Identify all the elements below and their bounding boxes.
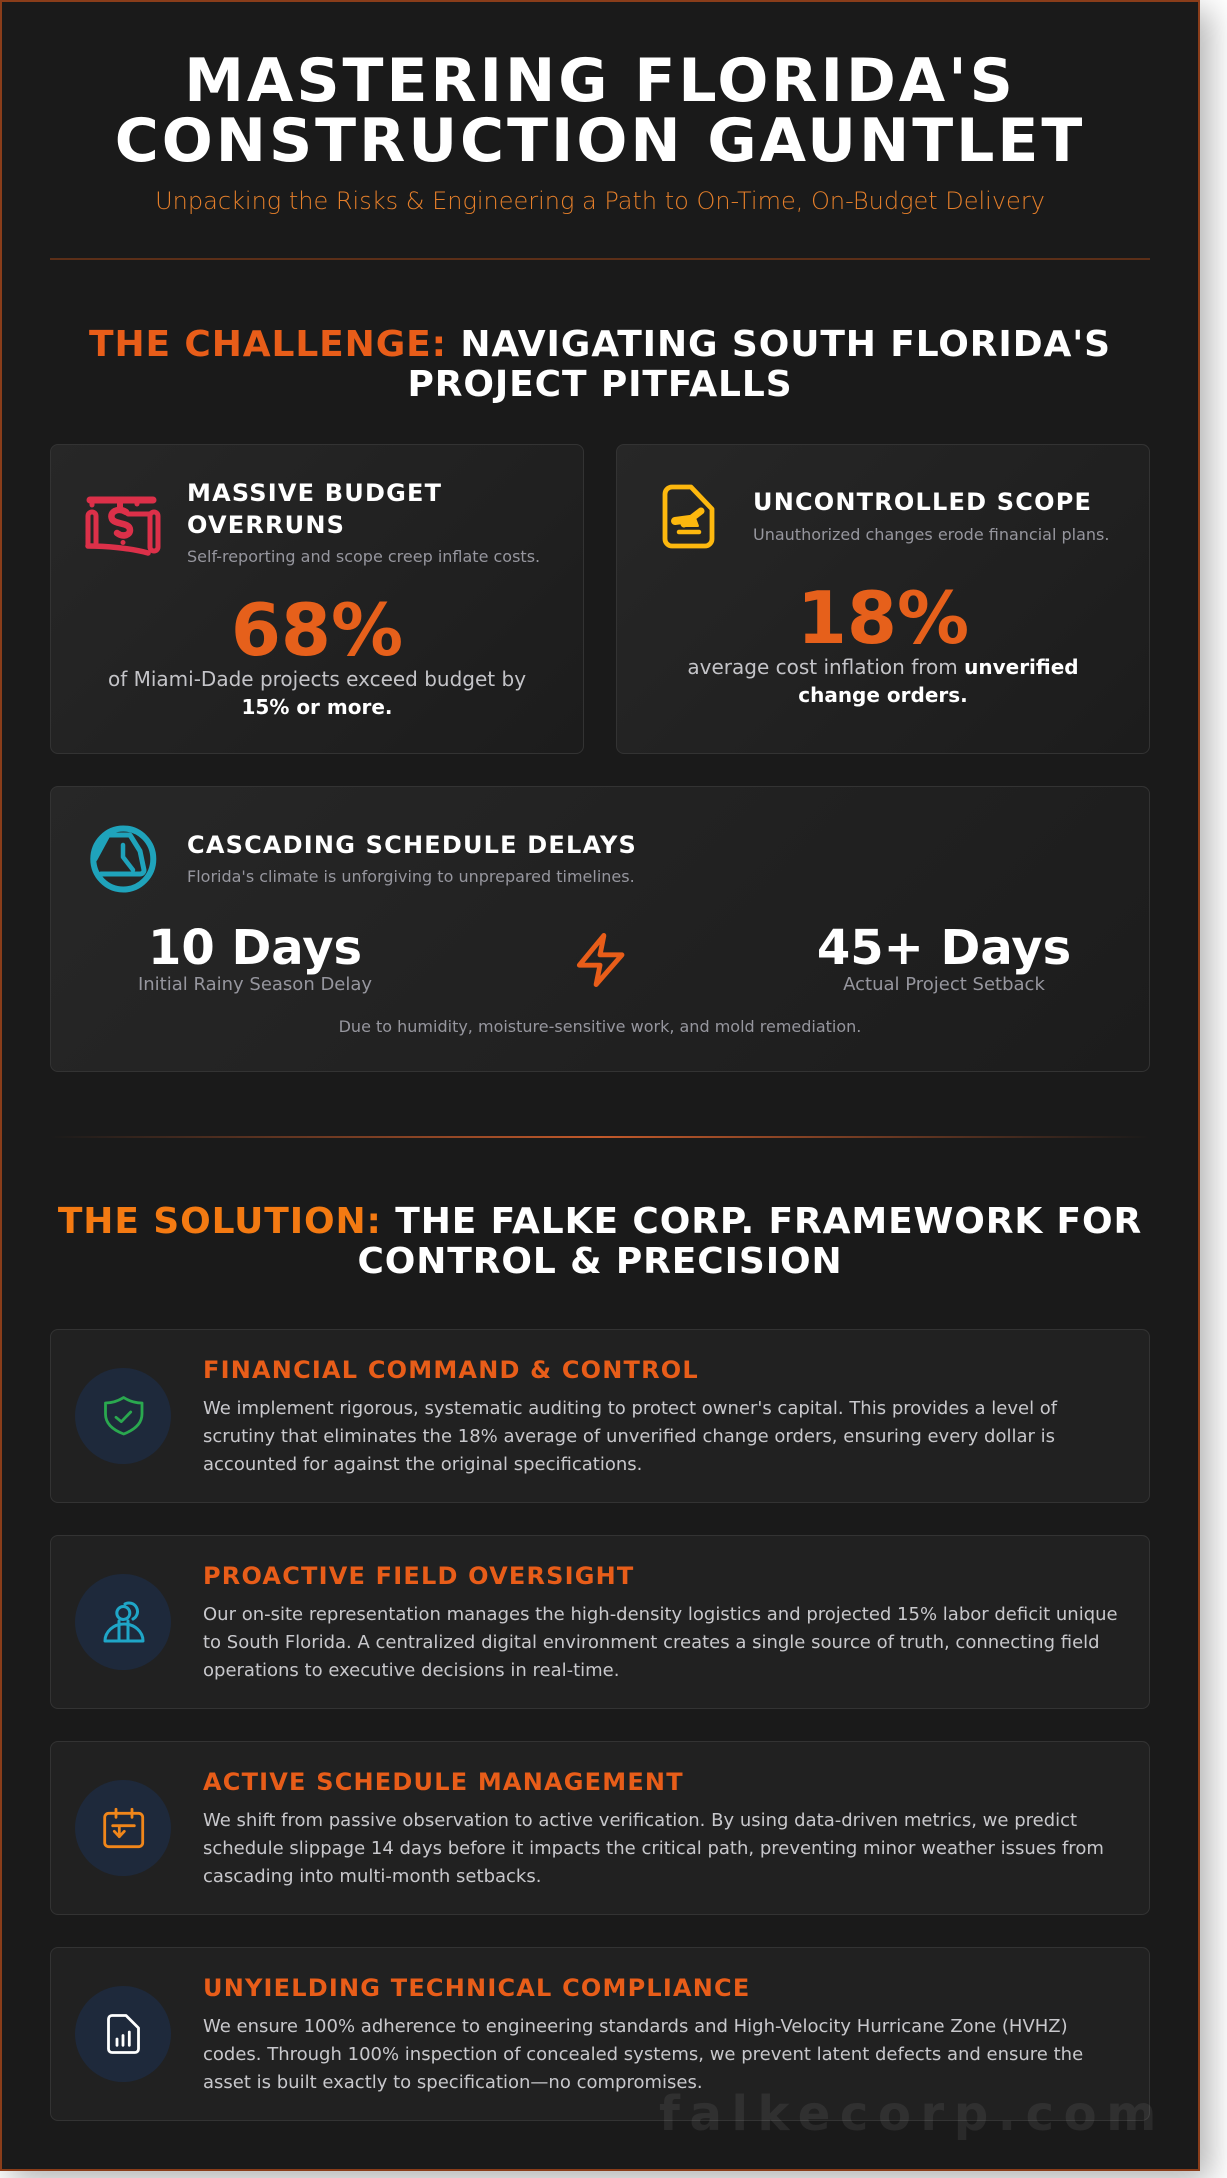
stat label: Initial Rainy Season Delay — [138, 974, 372, 995]
stat: 68%: 68% — [231, 588, 403, 672]
title: CONSTRUCTION GAUNTLET — [115, 106, 1085, 176]
body text: asset is built exactly to specification—no compromises. — [203, 2072, 703, 2093]
panel: unyielding technical compliance — [50, 1947, 1150, 2121]
card subtitle: Unauthorized changes erode financial plans. — [753, 525, 1109, 544]
icon: document with pencil — [662, 484, 714, 548]
body text: We implement rigorous, systematic auditing to protect owner's capital. This provides a level of — [203, 1398, 1057, 1419]
title: ACTIVE SCHEDULE MANAGEMENT — [203, 1768, 684, 1796]
body text — [203, 1810, 1104, 1887]
card subtitle: Self-reporting and scope creep inflate costs. — [187, 547, 540, 566]
icon: calendar — [75, 1780, 171, 1876]
panel: uncontrolled scope — [616, 444, 1150, 754]
stat description: of Miami-Dade projects exceed budget by — [108, 667, 526, 691]
body text: Our on-site representation manages the high-density logistics and projected 15% labor deficit unique — [203, 1604, 1118, 1625]
body text: scrutiny that eliminates the 18% average of unverified change orders, ensuring every dollar is — [203, 1426, 1055, 1447]
body text — [203, 2016, 1083, 2093]
body text: codes. Through 100% inspection of concealed systems, we prevent latent defects and ensure the — [203, 2044, 1083, 2065]
icon: clock — [90, 826, 156, 892]
panel: proactive field oversight — [50, 1535, 1150, 1709]
icon: lightning bolt — [576, 933, 624, 987]
panel: cascading schedule delays — [50, 786, 1150, 1072]
heading: the solution: THE SOLUTION: THE FALKE CORP. FRAMEWORK FOR — [58, 1201, 1142, 1242]
title: PROACTIVE FIELD OVERSIGHT — [203, 1562, 635, 1590]
card title: UNCONTROLLED SCOPE — [753, 488, 1092, 516]
card title: CASCADING SCHEDULE DELAYS — [187, 831, 637, 859]
card title — [187, 479, 442, 539]
panel: massive budget overruns — [50, 444, 584, 754]
title: UNYIELDING TECHNICAL COMPLIANCE — [203, 1974, 750, 2002]
icon: shield — [75, 1368, 171, 1464]
icon: field representative — [75, 1574, 171, 1670]
stat description: average cost inflation from unverified — [687, 655, 1079, 679]
note: Due to humidity, moisture-sensitive work, and mold remediation. — [339, 1017, 861, 1036]
body text — [203, 1398, 1058, 1475]
icon: document with bar chart — [75, 1986, 171, 2082]
stat label: Actual Project Setback — [843, 974, 1045, 995]
panel: financial command & control — [50, 1329, 1150, 1503]
heading: the solution — [58, 1201, 1142, 1282]
stat description — [108, 667, 526, 719]
body text: accounted for against the original specifications. — [203, 1454, 642, 1475]
body text: to South Florida. A centralized digital environment creates a single source of truth, connecting field — [203, 1632, 1100, 1653]
panel: active schedule management — [50, 1741, 1150, 1915]
stat description: change orders. — [798, 683, 968, 707]
body text: We ensure 100% adherence to engineering standards and High-Velocity Hurricane Zone (HVHZ) — [203, 2016, 1068, 2037]
heading: the solution: CONTROL & PRECISION — [357, 1241, 843, 1282]
watermark: falkecorp.com — [659, 2086, 1166, 2142]
stat: 45+ days: 45+ Days — [817, 920, 1071, 976]
stat description: 15% or more. — [241, 695, 392, 719]
title: MASTERING FLORIDA'S — [184, 46, 1016, 116]
card subtitle: Florida's climate is unforgiving to unprepared timelines. — [187, 867, 635, 886]
body text: We shift from passive observation to active verification. By using data-driven metrics, we predict — [203, 1810, 1077, 1831]
icon: budget overrun — [85, 496, 160, 556]
stat: 10 days: 10 Days — [148, 920, 362, 976]
card title: MASSIVE BUDGET — [187, 479, 442, 507]
body text: schedule slippage 14 days before it impacts the critical path, preventing minor weather issues from — [203, 1838, 1104, 1859]
body text: cascading into multi-month setbacks. — [203, 1866, 541, 1887]
title — [115, 46, 1085, 176]
title: FINANCIAL COMMAND & CONTROL — [203, 1356, 699, 1384]
heading: the challenge: THE CHALLENGE: NAVIGATING SOUTH FLORIDA'S — [89, 324, 1111, 365]
heading: the challenge: PROJECT PITFALLS — [407, 364, 793, 405]
stat: 18%: 18% — [797, 576, 969, 660]
card title: OVERRUNS — [187, 511, 345, 539]
heading: the challenge — [89, 324, 1111, 405]
body text — [203, 1604, 1118, 1681]
stat description — [687, 655, 1079, 707]
subtitle: Unpacking the Risks & Engineering a Path to On-Time, On-Budget Delivery — [155, 187, 1045, 215]
body text: operations to executive decisions in real-time. — [203, 1660, 619, 1681]
